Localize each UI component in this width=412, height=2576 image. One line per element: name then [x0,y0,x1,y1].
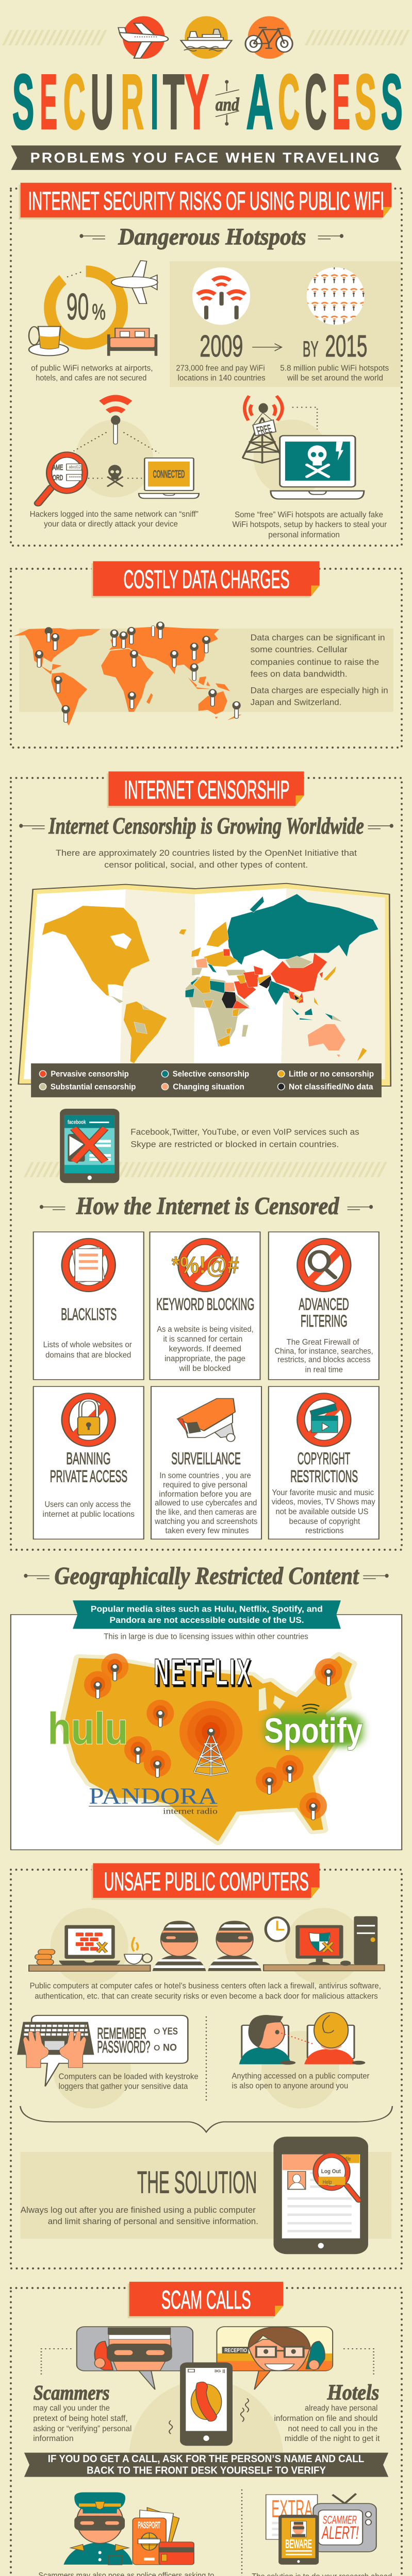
legend [31,1063,382,1097]
section banner [91,561,320,598]
text: the solution [21,2205,258,2226]
stat: unsecured networks: of public WiFi networks at airports, [31,364,153,372]
panel: costly data charges [13,561,393,726]
text: data charges: companies continue to raise the [251,657,379,667]
stat: 2009: locations in 140 countries [177,374,266,382]
title: SECURITY and ACCESS: Y [185,58,209,145]
panel: hotspot growth [170,261,401,387]
icon: tablet log out [273,2137,368,2254]
text: hackers: your data or directly attack your device [44,519,178,528]
icon: thief right [208,1921,261,1971]
text: public computers [30,1981,381,2001]
text: hackers [30,510,199,528]
illustration: fake hotspot [242,396,330,497]
card: surveillance: required to give personal [163,1481,248,1489]
panel: internet censorship: KEYWORD BLOCKING [156,1295,254,1314]
card: keyword blocking [150,1232,260,1380]
text: keystroke: Computers can be loaded with keystroke [59,2072,199,2081]
legend: Changing situation [173,1082,244,1092]
card: keyword blocking: inappropriate, the page [164,1354,245,1363]
stat: 2009: 273,000 free and pay WiFi [176,364,265,372]
chart: 90 percent donut: % [92,299,106,324]
icon: passport and cards [133,2507,194,2565]
card: surveillance: allowed to use cybercafes and [155,1498,257,1507]
connector dotted lines [41,2349,374,2376]
text: hotels: already have personal [305,2403,377,2412]
panel: unsafe public computers [17,1863,392,2254]
illustration: keystroke logger: REMEMBER [97,2024,146,2042]
dome behind phone [129,2380,283,2452]
card: surveillance: information before you are [159,1490,252,1498]
icon: wifi circle 2009 [192,267,250,325]
header [0,16,412,170]
icon: passport and cards: PASSPORT [138,2521,160,2530]
text: anyone around you [232,2072,369,2090]
panel: geographically restricted content: NETFLIX [154,1651,252,1692]
map: censorship by country [42,894,378,1063]
card: keyword blocking: it is scanned for certain [163,1334,242,1343]
card: surveillance: the like, and then cameras are [156,1507,257,1516]
panel: internet censorship: PRIVATE ACCESS [50,1467,127,1486]
text: scammers [33,2403,131,2443]
legend: Substantial censorship [51,1082,136,1092]
title: SECURITY and ACCESS: U [91,58,113,145]
legend: Pervasive censorship [51,1070,129,1079]
title: SECURITY and ACCESS: S [12,58,34,145]
panel: geographically restricted content: NETFLIX [156,1653,253,1694]
icon: ship [181,16,232,59]
illustration: keystroke logger: YES [162,2026,178,2037]
word: and: and [216,94,239,115]
card: banning private access: Users can only access the [45,1500,131,1509]
section banner [91,1863,320,1900]
heading: scammers: Scammers [34,2381,110,2404]
card: keyword blocking: keywords. If deemed [169,1344,241,1353]
stat: 2009 [176,329,266,382]
chart: 90 percent donut [44,263,128,349]
logo: pandora: PANDORA [89,1783,218,1809]
title: SECURITY and ACCESS: C [278,58,300,145]
icon: connected laptop [139,458,199,498]
ribbon: ask for name [24,2453,388,2477]
tan spots [51,1908,363,2108]
word: and [216,80,239,126]
map: united states [64,1656,352,1841]
panel: internet security risks of public wifi [19,183,401,539]
text: the solution: and limit sharing of personal and sensitive information. [48,2217,258,2226]
icon: small plane [111,261,158,303]
speech bubble: hotel [217,2327,333,2389]
illustration: newspaper and tv alert: ALERT! [321,2522,359,2543]
card: keyword blocking: will be blocked [179,1364,230,1372]
card: advanced filtering: in real time [305,1365,343,1374]
card: copyright restrictions: restrictions [305,1526,344,1535]
card: blacklists: domains that are blocked [45,1350,131,1359]
pins with signal rings [84,1653,342,1820]
icon: clock [266,1918,289,1941]
illustration: hacker sniffing: AME [53,463,63,471]
broadcast tower with rings [179,1701,242,1775]
illustration: newspaper and tv alert: SCAMMER [323,2513,357,2527]
ribbon: media sites: Pandora are not accessible outside of the US. [110,1616,304,1625]
text: blocked services [130,1127,359,1149]
text: blocked services: Skype are restricted or blocked in certain countries. [130,1140,339,1149]
card: surveillance: taken every few minutes [166,1526,249,1535]
icon: coffee [124,1937,152,1964]
card: copyright restrictions: not be available outside US [276,1507,368,1516]
legend: Not classified/No data [289,1082,373,1092]
icon: tablet log out: Help [323,2179,332,2185]
section banner: SCAM CALLS [161,2286,251,2314]
icon: airplane [118,16,168,59]
text: data charges: Japan and Switzerland. [251,698,341,707]
icon: tablet log out: See My Profile [326,2156,351,2162]
logo: netflix [154,1651,253,1694]
stat: 2009: 2009 [200,329,243,363]
title: SECURITY and ACCESS: T [163,58,185,145]
card: keyword blocking: As a website is being visited, [157,1325,254,1333]
text: opennet [56,849,357,870]
text: hotels [274,2403,380,2443]
illustration: fake hotspot: FREE [255,422,273,437]
icon: dark skull [107,465,123,486]
white frame [11,1615,402,1850]
text: anyone around you: is also open to anyone around you [232,2081,348,2090]
card: advanced filtering [269,1232,379,1380]
card: surveillance [151,1386,261,1539]
chart: 90 percent donut: 90 [67,286,89,327]
text: the solution: Always log out after you are finished using a public computer [21,2205,256,2215]
card: surveillance: watching you and screenshots [154,1517,257,1526]
illustration: newspaper and tv alert: EXTRA [271,2495,313,2522]
card: blacklists [34,1232,144,1380]
card: copyright restrictions: because of copyright [289,1517,360,1526]
hatch band right [302,30,412,45]
text: licensing: This in large is due to licensing issues within other countries [104,1632,308,1641]
text: fake hotspots: personal information [268,531,340,539]
text: fake hotspots [232,510,387,539]
icon: bed [107,328,157,356]
card: copyright restrictions: Your favorite music and music [272,1488,374,1497]
card: copyright restrictions [269,1386,379,1539]
card: banning private access [34,1386,144,1539]
icon: thief left [153,1921,206,1971]
icon: coins [35,1950,55,1965]
heading: hotels: Hotels [327,2380,379,2404]
hatch band left [0,30,110,45]
stat: by 2015: BY [303,336,319,361]
icon: connected laptop: CONNECTED [153,468,185,480]
icon: coffee cup [29,327,68,355]
title: SECURITY and ACCESS [12,58,403,145]
illustration: hacker sniffing: ORD [53,473,63,482]
brace [20,2106,392,2132]
icon: blocked tablet: facebook [68,1118,86,1125]
text: data charges: fees on data bandwidth. [251,669,348,679]
legend: Little or no censorship [289,1070,374,1079]
icon: blocked tablet [60,1109,119,1183]
title: SECURITY and ACCESS: C [305,58,326,145]
solution panel background [21,2152,391,2239]
card: blacklists: BLACKLISTS [61,1305,117,1324]
card: advanced filtering: The Great Firewall of [286,1337,359,1346]
text: hackers: Hackers logged into the same network can “sniff” [30,510,199,518]
card: banning private access: BANNING [66,1449,111,1468]
panel: internet censorship [19,771,393,1539]
text: scammers: may call you under the [33,2403,110,2412]
title: SECURITY and ACCESS: I [151,58,158,145]
speech bubble: scammer [77,2327,193,2389]
icon: ringing phone: 3G || [214,2369,225,2373]
ribbon: media sites [73,1600,341,1629]
title: SECURITY and ACCESS: C [63,58,86,145]
illustration: keystroke logger [17,2015,188,2087]
card: advanced filtering: restricts, and blocks access [277,1355,371,1364]
section banner [107,771,304,808]
card: keyword blocking: *%!@# [172,1252,239,1278]
text: keystroke [59,2072,199,2091]
illustration: fake police officer [63,2492,133,2565]
logo: hulu: hulu [48,1704,128,1753]
text: scammers: information [33,2434,74,2443]
illustration: keystroke logger: PASSWORD? [97,2038,150,2056]
text: keystroke: loggers that gather your sensitive data [59,2082,188,2091]
lakes [259,1688,285,1711]
card: blacklists: Lists of whole websites or [43,1340,132,1349]
icon: ringing phone [169,2362,249,2446]
folded map sheet [19,884,391,1086]
card: advanced filtering: China, for instance, searches, [275,1347,373,1355]
section banner [128,2282,283,2318]
panel: scam calls [24,2282,392,2576]
desk left [29,1965,150,1971]
title: SECURITY and ACCESS: E [333,58,350,145]
illustration: shoulder surfing [239,2012,365,2065]
wifi pattern fill [307,267,365,325]
text: hotels: not need to call you in the [288,2424,377,2433]
illustration: newspaper and tv alert: BEWARE [285,2537,312,2551]
illustration: hacker sniffing [38,395,159,503]
text: opennet: censor political, social, and other types of content. [104,860,308,870]
icon: wifi circle 2015 [307,267,365,325]
card: surveillance: In some countries , you are [159,1471,251,1480]
map: world with pins [13,622,242,726]
illustration: keystroke logger: NO [163,2042,177,2053]
illustration: newspaper and tv alert [266,2494,376,2565]
icon: tablet log out: Log Out [321,2168,341,2175]
illustration: hacker sniffing: ****** [69,476,81,480]
map backing [19,629,393,712]
text: scammers: asking or “verifying” personal [33,2424,131,2433]
stat: unsecured networks [31,364,153,382]
logo: pandora: internet radio [163,1807,218,1816]
hatch band [24,1162,389,1177]
text: data charges [251,633,388,707]
stat: by 2015: will be set around the world [287,374,383,382]
illustration: hacker sniffing: abcd12 [69,465,81,470]
ribbon: problems you face [11,145,402,170]
legend: Selective censorship [173,1070,249,1079]
text: hotels: information on file and should [274,2414,377,2422]
speech bubble: hotel: RECEPTIO [224,2347,247,2353]
stat: unsecured networks: hotels, and cafes are not secured [36,374,146,382]
desk right [263,1965,385,1971]
title: SECURITY and ACCESS: R [121,58,144,145]
heading: dangerous hotspots: Dangerous Hotspots [118,224,306,250]
ribbon: media sites: Popular media sites such as Hulu, Netflix, Spotify, and [91,1604,323,1614]
icon: infected laptop [271,436,364,499]
text: hotels: middle of the night to get it [285,2434,380,2443]
text: data charges: some countries. Cellular [251,645,348,654]
logo: spotify [264,1704,362,1751]
arrow [252,344,282,351]
title: SECURITY and ACCESS: E [40,58,57,145]
icon: desktop computer [295,1916,377,1965]
title: SECURITY and ACCESS: A [246,58,273,145]
stat: by 2015 [280,329,389,382]
text: scammers: pretext of being hotel staff, [33,2414,128,2422]
icon: bicycle [245,16,292,59]
card: surveillance: SURVEILLANCE [171,1449,241,1468]
panel: geographically restricted content [11,1563,402,1850]
icon: laptop firewall [59,1925,120,1965]
card: banning private access: internet at public locations [43,1510,135,1519]
